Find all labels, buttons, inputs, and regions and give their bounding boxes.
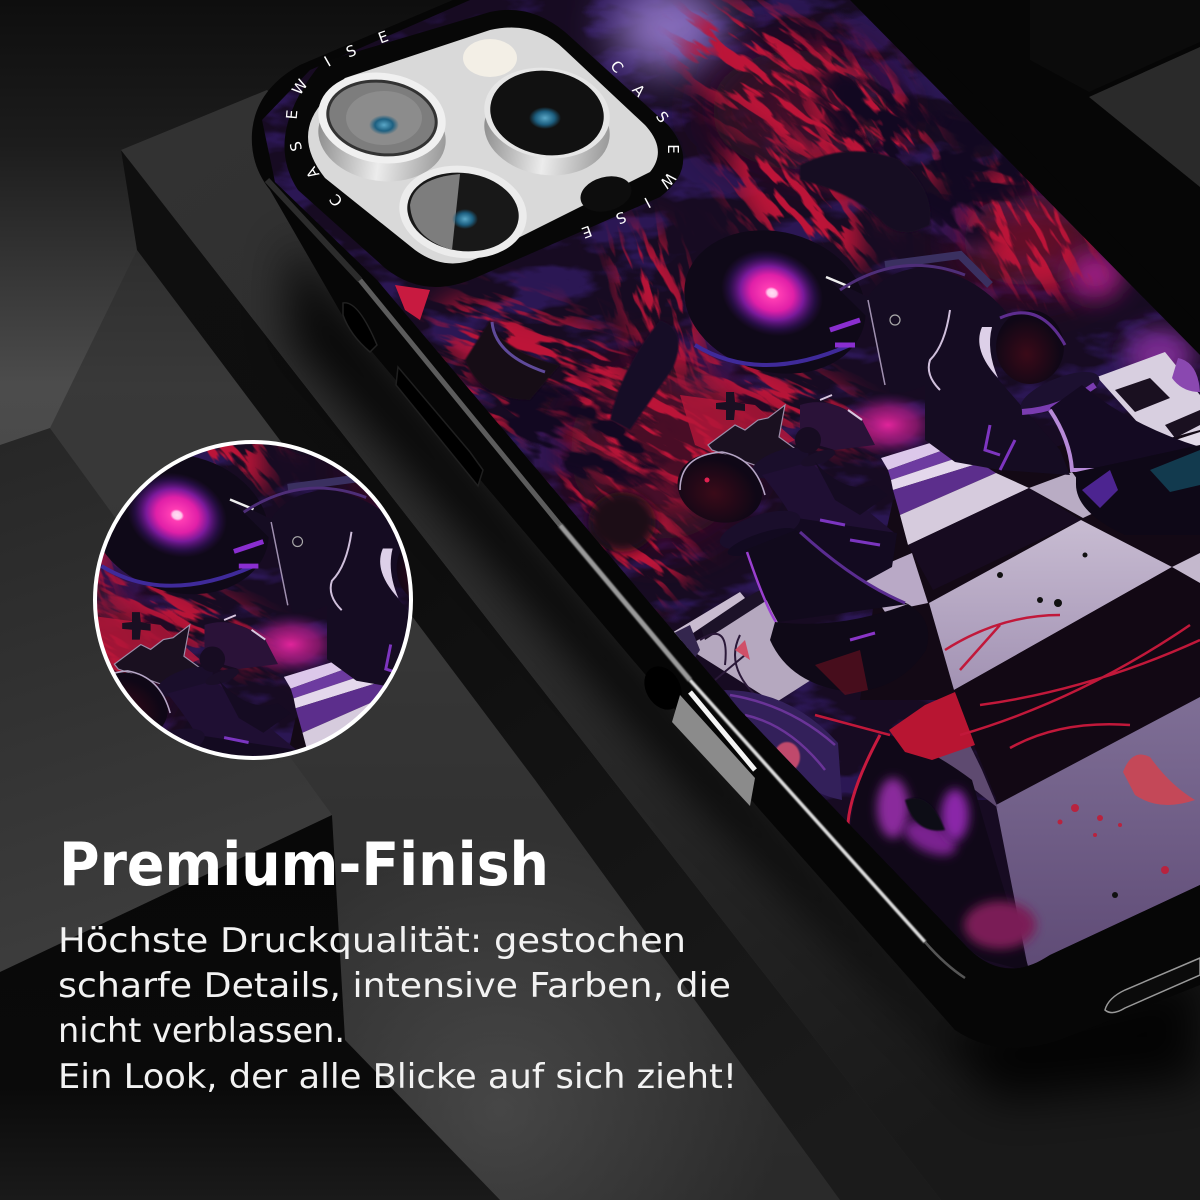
lower block front face [0, 815, 500, 1200]
camera island [283, 10, 683, 287]
title: Premium-Finish [59, 830, 549, 900]
flash [463, 39, 517, 77]
bottom port [1105, 958, 1200, 1013]
brand text: S [613, 207, 629, 228]
body text: scharfe Details, intensive Farben, die [58, 966, 731, 1006]
brand text: E [579, 222, 594, 242]
lens top left [312, 65, 452, 189]
brand text: S [652, 108, 672, 126]
brand text: W [656, 169, 679, 192]
brand text: A [629, 81, 649, 101]
artwork [262, 0, 1200, 968]
button: mute [343, 303, 377, 352]
ring [284, 10, 683, 287]
brand text: E [664, 144, 682, 154]
brand text: I [641, 193, 654, 211]
brand text: E [283, 109, 301, 120]
body text: nicht verblassen. [58, 1011, 345, 1051]
brand text: E [376, 27, 391, 47]
top right blocks [640, 0, 1200, 330]
brand text: I [321, 53, 334, 71]
case edge highlights [360, 280, 560, 525]
body text: Höchste Druckqualität: gestochen [58, 921, 686, 961]
button: side silver [637, 660, 755, 806]
brand text: C [326, 190, 346, 210]
lens bottom [393, 158, 533, 266]
brand text: S [286, 139, 306, 153]
phone case [252, 0, 1200, 1034]
brand text: W [288, 76, 312, 98]
case body [252, 0, 1200, 1048]
lit floor [50, 250, 840, 1200]
inset zoom circle [93, 440, 413, 760]
microphone dot [576, 171, 636, 217]
body text [58, 921, 737, 1097]
brand text: A [302, 163, 323, 182]
brand text [283, 27, 682, 242]
lower block top face [0, 428, 332, 972]
lens top right [478, 60, 616, 183]
button: volume [396, 367, 483, 486]
glass [308, 28, 658, 263]
body text: Ein Look, der alle Blicke auf sich zieht! [58, 1057, 737, 1097]
brand text: S [343, 41, 359, 61]
case shadow [290, 240, 1200, 1100]
brand text: C [607, 57, 627, 77]
pedestal side band [121, 150, 941, 1200]
